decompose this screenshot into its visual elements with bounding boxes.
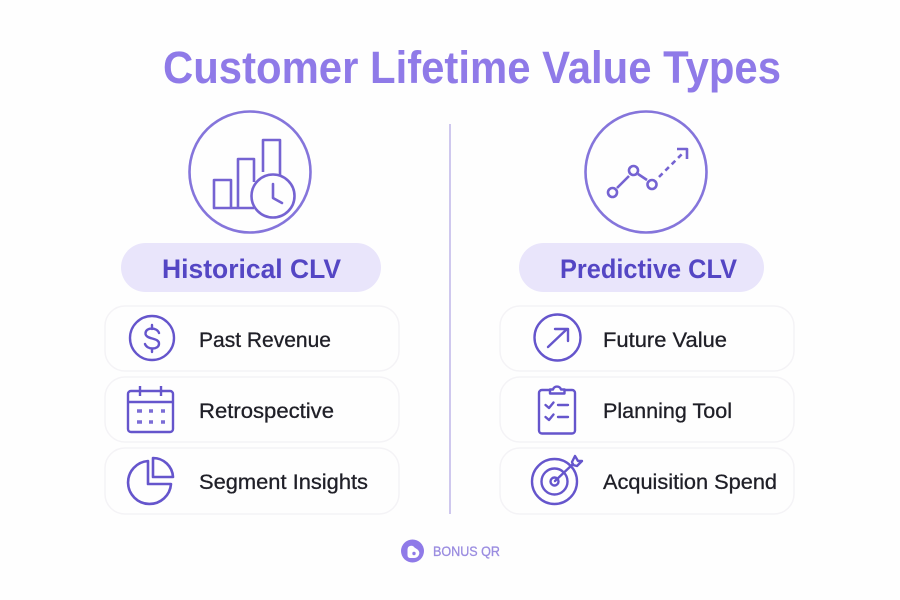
card: Future Value: Future Value <box>603 328 727 352</box>
card: Retrospective: Retrospective <box>199 399 334 423</box>
panel: predictive CLV <box>500 112 794 514</box>
card: Segment Insights <box>105 448 399 514</box>
card: Acquisition Spend: Acquisition Spend <box>603 470 777 494</box>
card: Past Revenue <box>105 306 399 371</box>
icon: target with arrow <box>532 456 582 504</box>
icon: bar chart with clock <box>190 112 310 232</box>
icon: calendar <box>128 386 173 432</box>
card: Planning Tool <box>500 377 794 442</box>
logo: Bonus QR <box>401 540 500 562</box>
card: Planning Tool: Planning Tool <box>603 399 732 423</box>
panel: historical CLV <box>105 112 399 514</box>
card: Segment Insights: Segment Insights <box>199 470 368 494</box>
logo: Bonus QR: BONUS QR <box>433 544 500 559</box>
heading pill: Historical CLV: Historical CLV <box>162 254 341 284</box>
card: Acquisition Spend <box>500 448 794 514</box>
title: Customer Lifetime Value Types <box>163 42 781 93</box>
icon: arrow in circle <box>534 314 580 360</box>
card: Future Value <box>500 306 794 371</box>
icon: dollar coin <box>130 316 174 360</box>
card: Retrospective <box>105 377 399 442</box>
icon: pie chart <box>128 458 173 504</box>
heading pill: Predictive CLV: Predictive CLV <box>560 254 737 284</box>
heading pill: Predictive CLV <box>519 243 764 292</box>
icon: trend line with dashed arrow <box>586 112 706 232</box>
heading pill: Historical CLV <box>121 243 381 292</box>
icon: clipboard checklist <box>539 387 575 434</box>
card: Past Revenue: Past Revenue <box>199 328 331 352</box>
